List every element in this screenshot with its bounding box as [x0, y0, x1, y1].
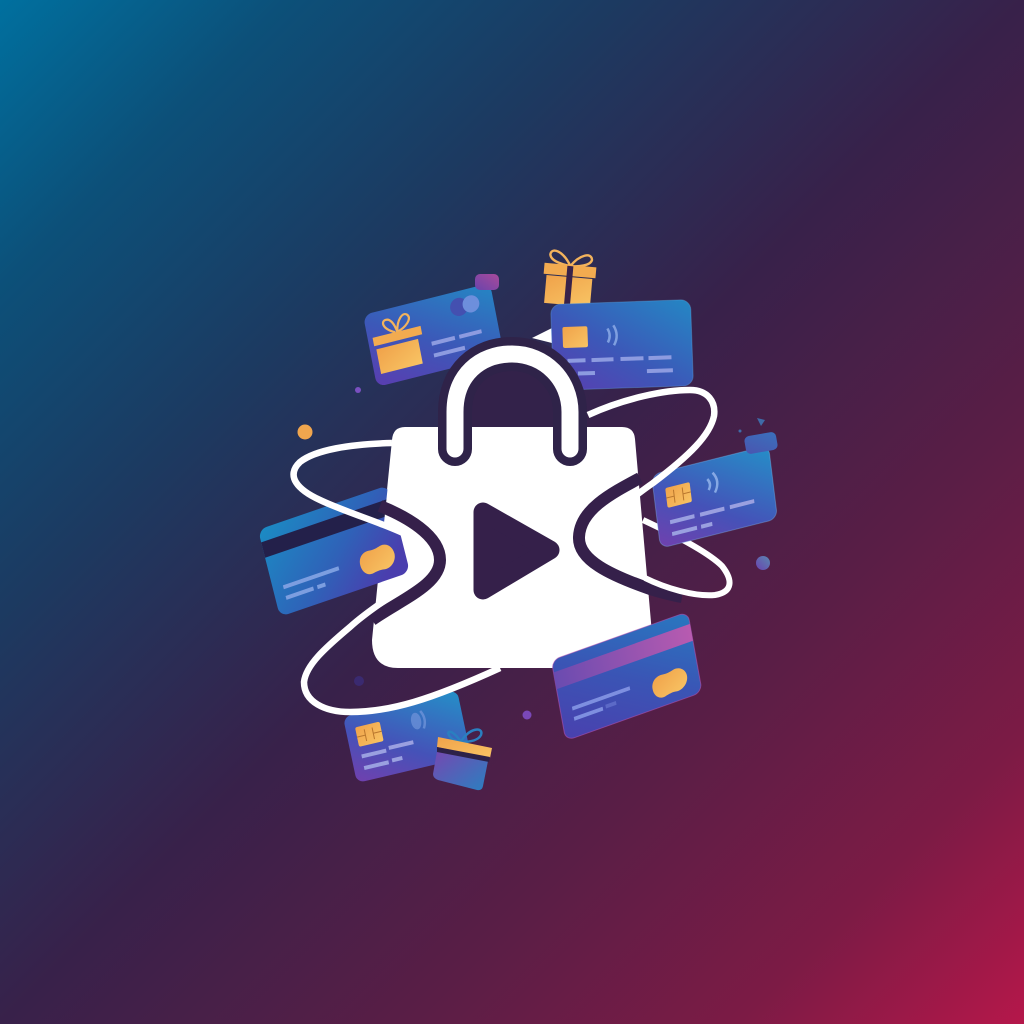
card: bottom right [551, 612, 702, 741]
orbit: lower right white line [643, 520, 730, 595]
tab on right card [744, 431, 778, 455]
card details [283, 566, 342, 600]
icon: gift at bottom left [433, 730, 492, 790]
card details [670, 499, 756, 536]
orbit: white ribbon lines [294, 390, 714, 712]
payment oval [357, 542, 397, 577]
contactless waves [607, 325, 617, 345]
icon: play triangle [483, 512, 550, 590]
card: bottom left [343, 690, 471, 783]
card details [361, 740, 417, 770]
tab on top left card [475, 274, 499, 290]
right dark band of the orbit [579, 478, 682, 597]
card: right [651, 445, 778, 548]
contactless waves [409, 710, 426, 731]
purple stripe [553, 624, 693, 689]
chip [665, 482, 692, 508]
payment oval [651, 665, 689, 700]
decorative dots [298, 387, 770, 720]
card details [572, 686, 632, 721]
magnetic stripe [261, 498, 395, 558]
chip [355, 722, 384, 747]
contactless waves [707, 472, 718, 494]
chip [562, 326, 588, 348]
icon: shopping bag body [372, 328, 655, 668]
icon: gift on card [370, 311, 428, 374]
icon: gift on top [541, 250, 598, 307]
left dark band of the orbit [372, 506, 440, 620]
card: top right [551, 300, 693, 390]
card: top left with gift [363, 283, 504, 387]
card: left [258, 485, 410, 617]
card details [431, 329, 484, 358]
card details [567, 355, 673, 376]
small sparks near right card [738, 418, 765, 432]
white bag portion above the ribbon, covering the left card [384, 470, 460, 560]
icon: bag handle [455, 354, 570, 449]
